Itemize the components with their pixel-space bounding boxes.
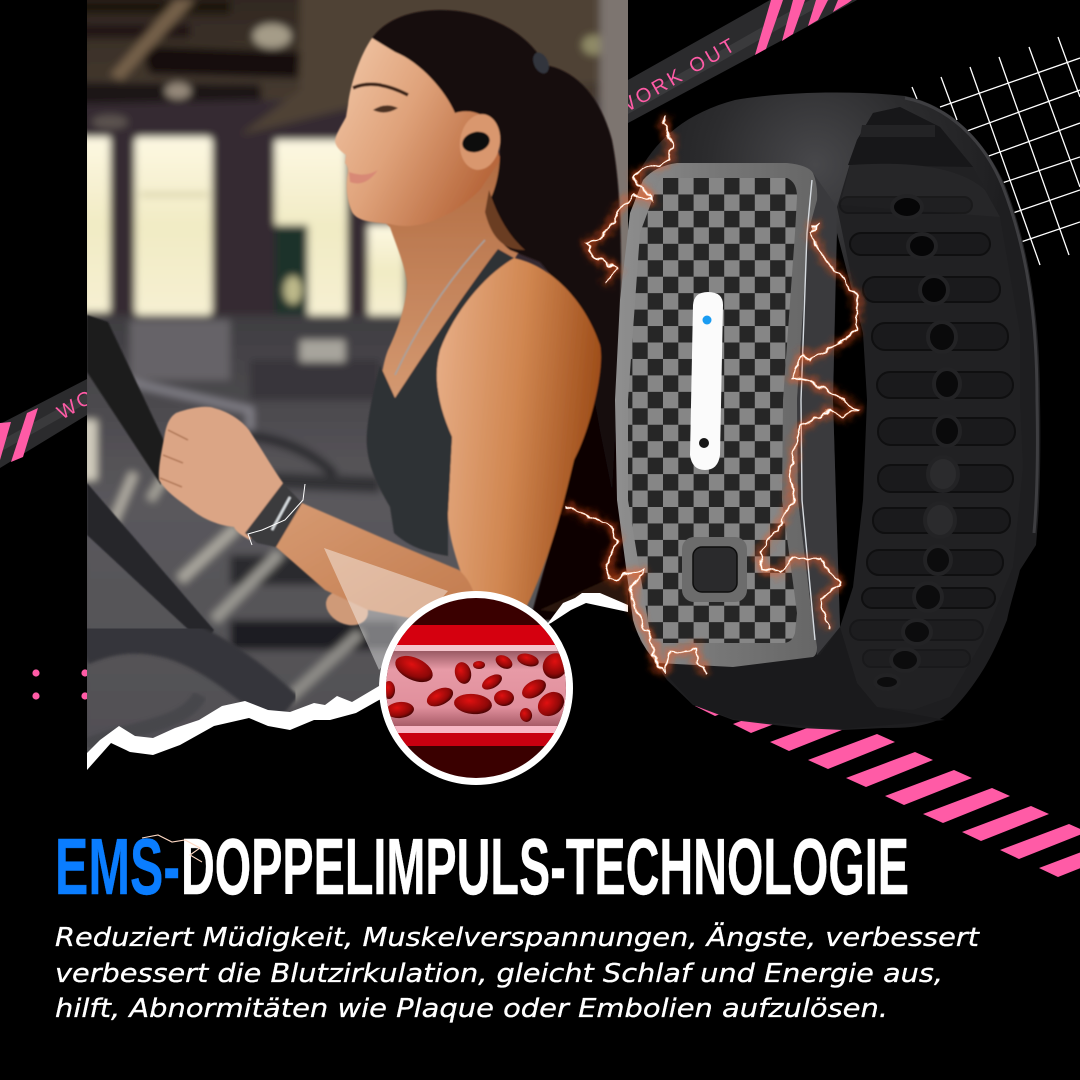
band outer shell [640,93,1040,730]
magnifier beam [324,548,448,670]
hair highlight [485,190,525,250]
outer rim [905,98,1037,533]
wristband product [615,93,1040,730]
fist [159,407,283,540]
inner strap [837,107,1023,710]
earbud [461,130,491,154]
line two: verbessert die Blutzirkulation, gleicht Schlaf und Energie aus, [55,959,943,989]
pink diagonal stripes [695,695,1080,877]
face [335,38,500,226]
red blood cells [386,653,565,722]
strap ribs [860,125,935,137]
left ribbon stripes [0,408,38,462]
other hand [325,592,369,626]
back hair shadow [532,401,626,621]
title [55,822,909,911]
gap between panel and strap [833,233,867,627]
scrunchie [532,52,550,74]
square button [682,537,747,602]
wrist spark [248,484,305,545]
peg holes [875,196,960,689]
black dot [699,438,709,448]
finger creases [160,430,188,487]
treadmill handle [87,483,214,645]
white indicator strip [690,292,723,470]
panel highlight edge [801,180,815,640]
checkered face [628,178,797,643]
title accent EMS: EMS- [55,822,180,911]
forearm [276,503,476,620]
pink dots [32,669,89,700]
upper arm and shoulder [437,258,601,612]
circle blood vessel zoom [379,590,575,790]
neck and chest [370,150,520,405]
lips [349,170,378,184]
sports top [367,249,514,556]
lightning effects [565,117,858,672]
top work out ribbon [612,0,857,123]
ribbon text: WORK OUT [612,35,739,120]
necklace [395,240,485,375]
eye [373,105,398,113]
black mask below edge [87,603,628,800]
bracelet on wrist [245,483,302,547]
description text [55,921,980,1024]
hair and ponytail [372,10,621,490]
line three: hilft, Abnormitäten wie Plaque oder Embolien aufzulösen. [55,994,888,1024]
grid decoration [912,37,1080,265]
torn white edge [87,593,628,800]
strap slots [840,197,1015,667]
eyebrow [353,84,408,95]
left ribbon text: WO [54,385,100,424]
title spark [142,835,202,862]
side of front panel [797,173,840,655]
line one: Reduziert Müdigkeit, Muskelverspannungen, Ängste, verbessert [55,921,980,953]
ribbon stripes [755,0,852,55]
ear [460,112,502,170]
strap upper shadow [848,107,973,167]
left work out ribbon [0,379,100,468]
blue led [702,316,712,324]
woman [159,10,640,632]
front panel metal frame [615,163,817,667]
treadmill console [87,315,166,485]
gym photo with woman [80,0,640,785]
blurred gym background [80,0,640,785]
band bottom wrap shading [655,627,945,729]
